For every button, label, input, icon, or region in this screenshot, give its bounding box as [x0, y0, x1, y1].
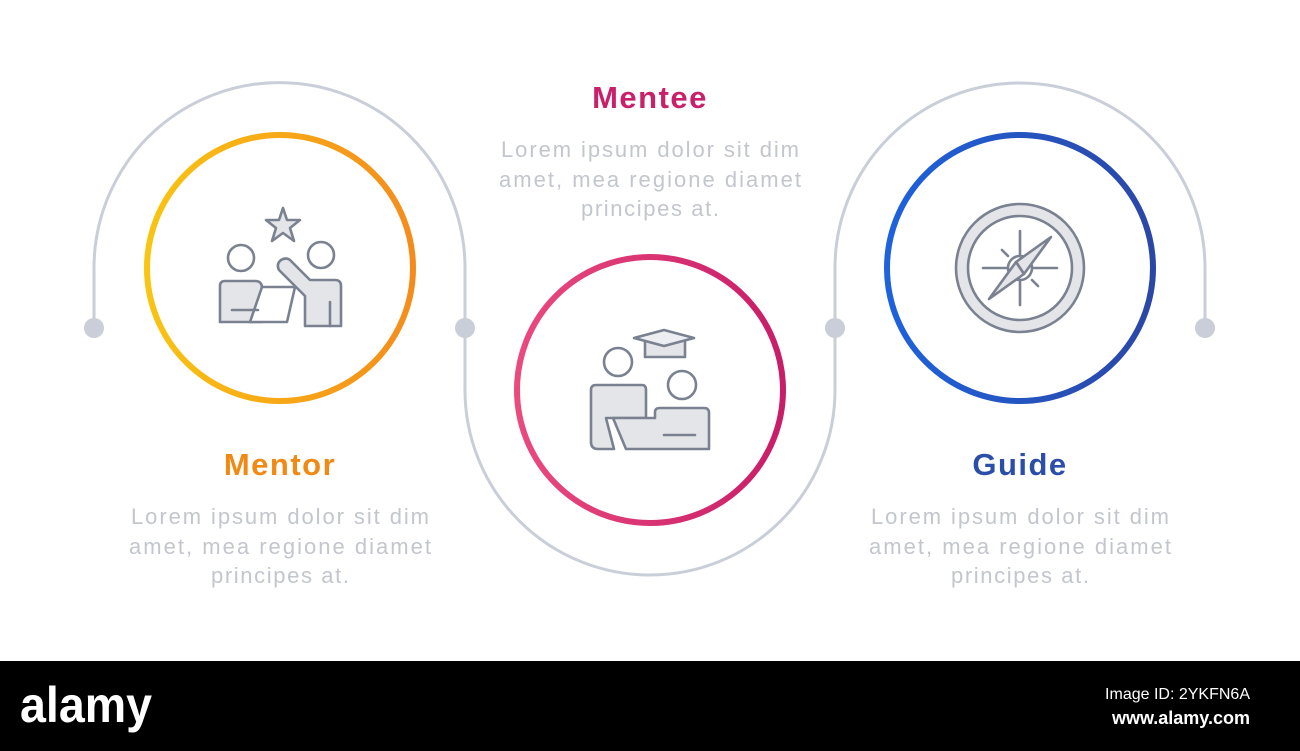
text block: mentee: principes at. [581, 196, 719, 221]
footer bar: www.alamy.com [1111, 708, 1250, 728]
text block: mentor [129, 504, 431, 588]
icon: mentor [220, 208, 341, 326]
text block: mentee: amet, mea regione diamet [499, 167, 801, 192]
text block: mentee: Lorem ipsum dolor sit dim [501, 137, 799, 162]
ring: guide [887, 135, 1153, 401]
ring: mentor [147, 135, 413, 401]
text block: guide: amet, mea regione diamet [869, 534, 1171, 559]
footer bar: Image ID: 2YKFN6A [1105, 686, 1250, 703]
text block: mentor: principes at. [211, 563, 349, 588]
text block: mentee [499, 137, 801, 221]
gray connecting track [94, 83, 1205, 575]
ring: mentee [517, 257, 783, 523]
icon: mentee [591, 330, 709, 449]
text block: guide [869, 504, 1171, 588]
text block: guide: Lorem ipsum dolor sit dim [871, 504, 1169, 529]
track dots [84, 318, 1215, 338]
text block: mentor: Lorem ipsum dolor sit dim [131, 504, 429, 529]
text block: mentor: amet, mea regione diamet [129, 534, 431, 559]
text block: guide: principes at. [951, 563, 1089, 588]
heading: mentee: Mentee [592, 80, 708, 115]
footer bar [0, 661, 1300, 751]
heading: mentor: Mentor [224, 447, 336, 482]
icon: compass [956, 204, 1084, 332]
heading: guide: Guide [972, 447, 1068, 482]
footer bar: alamy [20, 677, 152, 733]
